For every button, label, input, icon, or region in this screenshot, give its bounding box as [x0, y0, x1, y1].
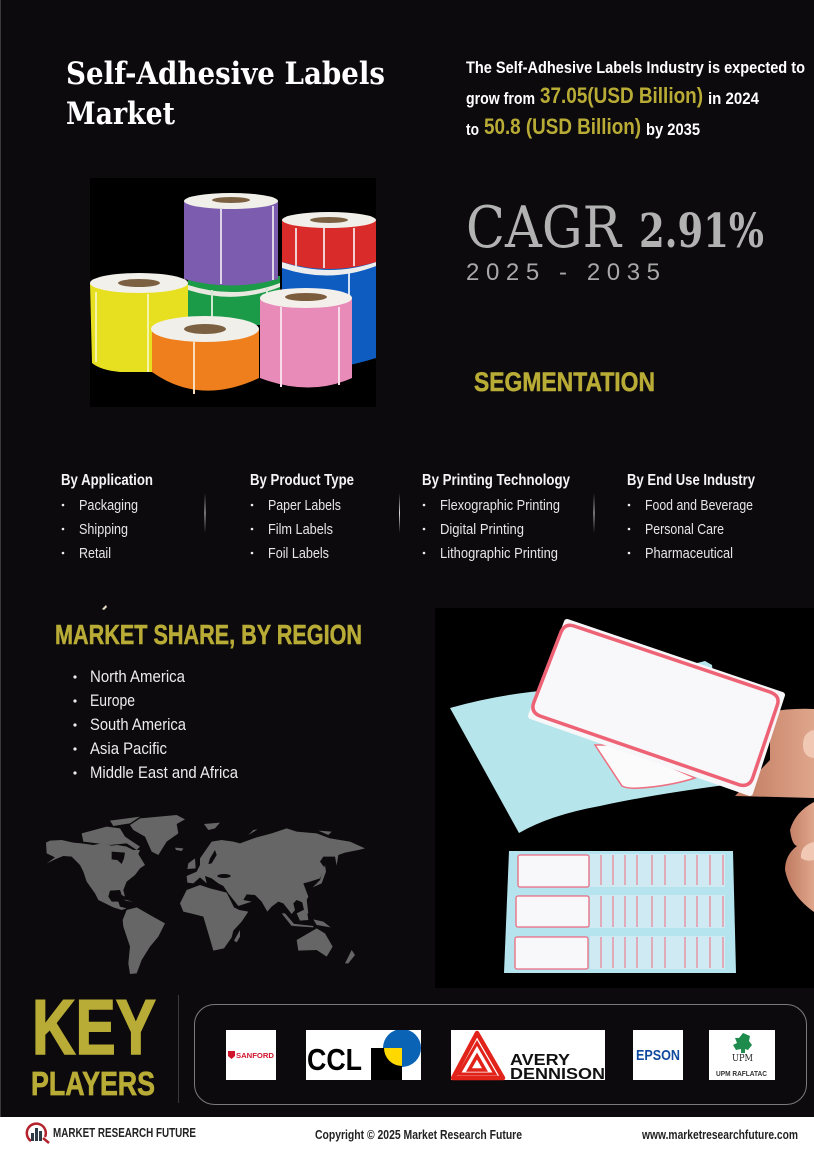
market size summary text — [466, 59, 805, 139]
logo: Sanford: SANFORD — [236, 1053, 274, 1060]
CAGR figure: 2.91% — [639, 204, 764, 259]
footer copyright: Copyright © 2025 Market Research Future — [315, 1127, 522, 1142]
segment column: by application: Retail — [79, 545, 111, 562]
logo: Epson: EPSON — [636, 1047, 680, 1064]
roll: red — [282, 212, 376, 269]
roll: blue — [282, 262, 376, 366]
icon: magnifier chart logo — [27, 1124, 49, 1143]
segment column: by printing technology — [422, 472, 570, 562]
logo: Avery Dennison: DENNISON — [510, 1066, 605, 1083]
roll: yellow — [90, 273, 188, 372]
title — [66, 56, 385, 132]
logo: UPM Raflatac: UPM — [732, 1054, 753, 1064]
market size summary text: in 2024 — [708, 90, 760, 108]
segment column: by application — [61, 472, 153, 562]
world map — [46, 815, 365, 974]
logo: CCL — [306, 1029, 421, 1080]
market size summary text: grow from — [466, 90, 535, 108]
held label card — [531, 622, 782, 793]
market size summary text: 50.8 (USD Billion) — [484, 114, 641, 139]
roll: orange — [151, 316, 259, 394]
fingers — [735, 709, 814, 912]
logo: Avery Dennison — [451, 1030, 605, 1083]
logo: CCL: CCL — [307, 1042, 362, 1077]
CAGR figure: 2025 - 2035 — [466, 259, 660, 286]
key players heading — [31, 983, 156, 1102]
segment column: by end use industry: Pharmaceutical — [645, 545, 733, 562]
segment column: by printing technology: By Printing Technology — [422, 472, 570, 489]
key players heading: KEY — [32, 983, 156, 1071]
photo: red-bordered labels in hand — [435, 608, 814, 988]
title: Market — [66, 96, 176, 132]
market size summary text: 37.05(USD Billion) — [540, 83, 703, 108]
segment column: by end use industry — [627, 472, 755, 562]
market size summary text: by 2035 — [646, 121, 700, 139]
key players logo panel — [194, 1004, 806, 1104]
logo: Epson — [633, 1030, 683, 1080]
title: Self-Adhesive Labels — [66, 56, 385, 92]
segment column: by product type — [250, 472, 354, 562]
roll: pink — [260, 288, 352, 388]
footer bar — [0, 1117, 814, 1150]
logo: Sanford — [226, 1030, 276, 1080]
CAGR figure: CAGR — [466, 195, 623, 261]
segment column: by application: By Application — [61, 472, 153, 489]
region list: Middle East and Africa — [90, 763, 238, 782]
region list: Europe — [90, 691, 135, 710]
region list: South America — [90, 715, 186, 734]
label sheet — [504, 851, 736, 973]
lower white label — [595, 745, 695, 788]
segment column: by printing technology: Lithographic Printing — [440, 545, 558, 562]
footer brand: MARKET RESEARCH FUTURE — [53, 1125, 196, 1140]
key players heading: PLAYERS — [31, 1065, 155, 1102]
roll: green — [188, 276, 280, 326]
segment column: by printing technology: Digital Printing — [440, 521, 524, 538]
segment column: by product type: By Product Type — [250, 472, 354, 489]
market size summary text: to — [466, 121, 479, 139]
heading: market share by region: MARKET SHARE, BY REGION — [55, 619, 362, 650]
segment column: by end use industry: By End Use Industry — [627, 472, 755, 489]
segment column: by printing technology: Flexographic Printing — [440, 497, 560, 514]
segment column: by application: Packaging — [79, 497, 138, 514]
segment column: by product type: Foil Labels — [268, 545, 329, 562]
segment column: by end use industry: Personal Care — [645, 521, 724, 538]
CAGR figure — [466, 195, 764, 286]
segment column: by end use industry: Food and Beverage — [645, 497, 753, 514]
logo: UPM Raflatac — [709, 1030, 775, 1080]
segment column: by product type: Paper Labels — [268, 497, 341, 514]
photo: coloured label rolls — [90, 178, 376, 407]
heading: segmentation: SEGMENTATION — [474, 367, 655, 397]
logo: UPM Raflatac: UPM RAFLATAC — [716, 1071, 767, 1078]
roll: purple — [184, 193, 278, 286]
region list — [73, 667, 238, 782]
region list: North America — [90, 667, 185, 686]
region list: Asia Pacific — [90, 739, 167, 758]
segment column: by application: Shipping — [79, 521, 128, 538]
logo: Avery Dennison: AVERY — [510, 1052, 571, 1069]
blue backing sheet — [450, 661, 725, 833]
segment column: by product type: Film Labels — [268, 521, 333, 538]
